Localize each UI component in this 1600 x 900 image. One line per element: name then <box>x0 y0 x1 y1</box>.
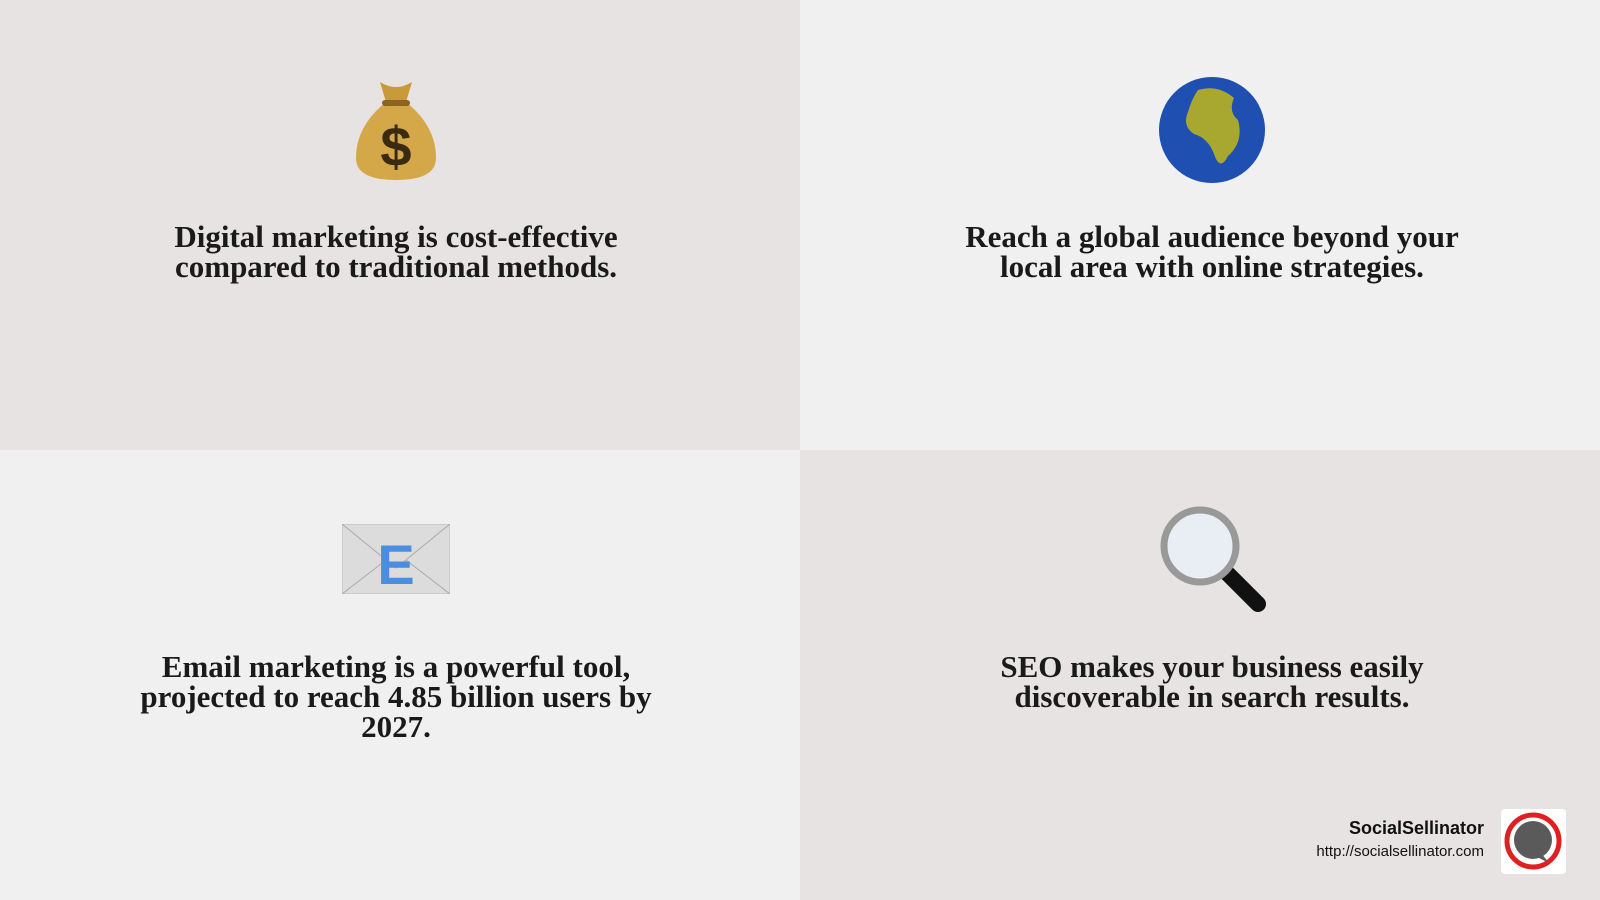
text: email marketing <box>140 649 652 744</box>
brand text <box>1316 818 1484 860</box>
icon: money bag: $ <box>380 115 412 178</box>
text: global audience: local area with online strategies. <box>1000 249 1424 284</box>
text: SEO: SEO makes your business easily <box>1000 649 1424 684</box>
text: email marketing: projected to reach 4.85 billion users by <box>140 679 652 714</box>
text: global audience <box>965 219 1459 284</box>
text: email marketing: 2027. <box>361 709 431 744</box>
panel: SEO <box>800 450 1600 900</box>
text: global audience: Reach a global audience beyond your <box>965 219 1459 254</box>
text: SEO: discoverable in search results. <box>1015 679 1409 714</box>
icon: money bag <box>356 82 436 180</box>
icon: magnifier <box>1160 506 1266 612</box>
icon: globe <box>1159 77 1265 183</box>
text: cost-effective: compared to traditional methods. <box>175 249 617 284</box>
text: cost-effective <box>174 219 618 284</box>
brand text: SocialSellinator <box>1349 818 1484 838</box>
icon: envelope <box>342 524 450 594</box>
text: SEO <box>1000 649 1424 714</box>
panel: email marketing <box>0 450 800 900</box>
panel: cost-effective <box>0 0 800 450</box>
logo <box>1501 809 1566 874</box>
panel: global audience <box>800 0 1600 450</box>
text: cost-effective: Digital marketing is cost-effective <box>174 219 618 254</box>
text: email marketing: Email marketing is a powerful tool, <box>162 649 630 684</box>
brand text: http://socialsellinator.com <box>1316 843 1484 860</box>
